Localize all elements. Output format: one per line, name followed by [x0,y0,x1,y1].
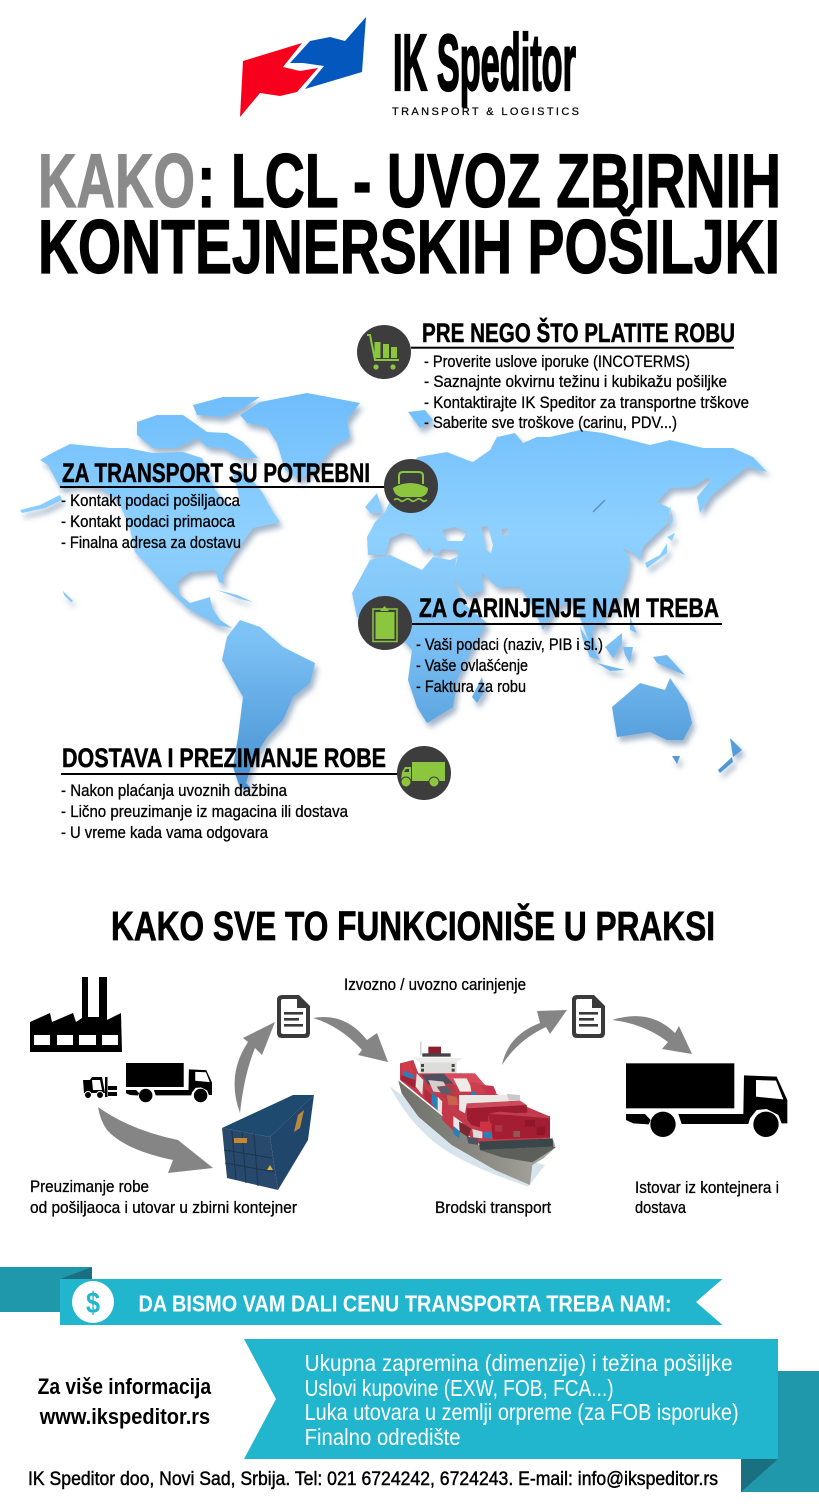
heading: DOSTAVA I PREZIMANJE ROBE [62,743,386,773]
heading: ZA CARINJENJE NAM TREBA [419,593,719,623]
requirements list: Ukupna zapremina (dimenzije) i težina pošiljke [305,1350,733,1376]
icon: truck [397,746,451,800]
arrow: ship to document [502,1010,567,1065]
list [61,492,241,552]
Aleutian chain [20,495,62,513]
title word KAKO: KAKO [38,139,195,224]
list: - Kontaktirajte IK Speditor za transportne trškove [424,394,749,412]
label: pickup: od pošiljaoca i utovar u zbirni kontejner [30,1199,297,1217]
logo mark: red hand [240,43,318,117]
list [424,353,749,432]
icon: large truck [626,1063,787,1137]
arrow: container to document [235,1022,275,1113]
label: pickup: Preuzimanje robe [30,1178,149,1196]
requirements list: Uslovi kupovine (EXW, FOB, FCA...) [305,1375,614,1401]
Sakhalin [668,505,673,532]
logo mark: blue hand [290,17,366,89]
label: unloading: dostava [635,1199,687,1217]
Arctic islands [137,415,258,458]
panel: pre nego sto platite robu [357,317,749,432]
world map [20,393,767,788]
ribbon: required information [244,1339,819,1492]
New Zealand south [718,757,733,773]
contact callout [38,1374,212,1429]
South America [222,620,315,788]
Sumatra [580,627,600,660]
Tasmania [672,756,680,764]
Hokkaido [667,533,675,541]
footer: IK Speditor doo, Novi Sad, Srbija. Tel: 021 6724242, 6724243. E-mail: info@ikspeditor.rs [28,1469,718,1490]
label: unloading: Istovar iz kontejnera i [635,1179,779,1197]
list: - Vaši podaci (naziv, PIB i sl.) [416,636,603,654]
arrow: document to truck [612,1016,692,1054]
label: sea transport: Brodski transport [435,1199,551,1217]
list: - Nakon plaćanja uvoznih dažbina [61,782,288,800]
logo tagline: TRANSPORT & LOGISTICS [392,106,579,118]
list: - U vreme kada vama odgovara [61,824,269,842]
list: - Saberite sve troškove (carinu, PDV...) [424,414,677,432]
Honshu [645,543,667,568]
icon: container ship [390,1042,556,1187]
list: - Proverite uslove iporuke (INCOTERMS) [424,353,690,371]
icon: document [572,995,605,1038]
panel: dostava i prezimanje robe [61,743,451,842]
list: - Vaše ovlašćenje [416,657,528,675]
ribbon: price heading [0,1267,722,1325]
list: - Saznajnte okvirnu težinu i kubikažu pošiljke [424,373,727,391]
label: customs: Izvozno / uvozno carinjenje [344,976,526,994]
requirements list [305,1350,739,1450]
North America [40,444,280,628]
icon: dollar: $ [86,1287,100,1320]
New Guinea [653,655,685,675]
Ellesmere [193,397,260,417]
icon: document [277,995,310,1038]
list: - Lično preuzimanje iz magacina ili dostava [61,803,349,821]
New Zealand north [730,738,742,757]
list [416,636,603,696]
icon: shopping cart [357,325,411,379]
list [61,782,349,842]
requirements list: Finalno odredište [305,1424,461,1450]
Eurasia [367,430,767,650]
Borneo [605,633,622,658]
ribbon heading text: DA BISMO VAM DALI CENU TRANSPORTA TREBA NAM: [138,1290,672,1316]
contact callout: www.ikspeditor.rs [39,1404,210,1429]
Greenland [240,393,360,480]
Hawaii [63,591,73,602]
list: - Kontakt podaci pošiljaoca [61,492,241,510]
process diagram [30,976,787,1217]
icon: forklift [83,1077,117,1098]
Great Britain [365,493,383,513]
Kamchatka [697,477,727,513]
icon: dollar [72,1281,114,1323]
icon: factory [30,977,122,1052]
Sulawesi [623,647,633,663]
Africa [352,555,487,723]
panel: za transport su potrebni [60,458,438,552]
logo [240,17,579,118]
Cuba [217,590,253,602]
contact callout: Za više informacija [38,1374,212,1399]
text: IK Speditor [393,18,576,107]
requirements list: Luka utovara u zemlji orpreme (za FOB isporuke) [305,1399,739,1425]
icon: shipping container [222,1095,314,1190]
icon: small truck [126,1063,212,1102]
title [38,139,781,290]
icon: clipboard [358,596,412,650]
lake Baikal [593,500,605,512]
arrow: document to ship [313,1017,388,1062]
list: - Kontakt podaci primaoca [61,513,236,531]
Australia [612,678,692,740]
Java [597,663,625,671]
label: pickup [30,1178,297,1217]
Madagascar [472,677,485,703]
arrow: pickup to container [98,1107,213,1173]
Svalbard [408,410,433,428]
panel: za carinjenje nam treba [358,593,722,696]
list: - Faktura za robu [416,678,526,696]
icon: ship [384,459,438,513]
Philippines [630,617,637,633]
label: unloading [635,1179,779,1217]
list: - Finalna adresa za dostavu [61,534,241,552]
heading: ZA TRANSPORT SU POTREBNI [62,458,370,488]
